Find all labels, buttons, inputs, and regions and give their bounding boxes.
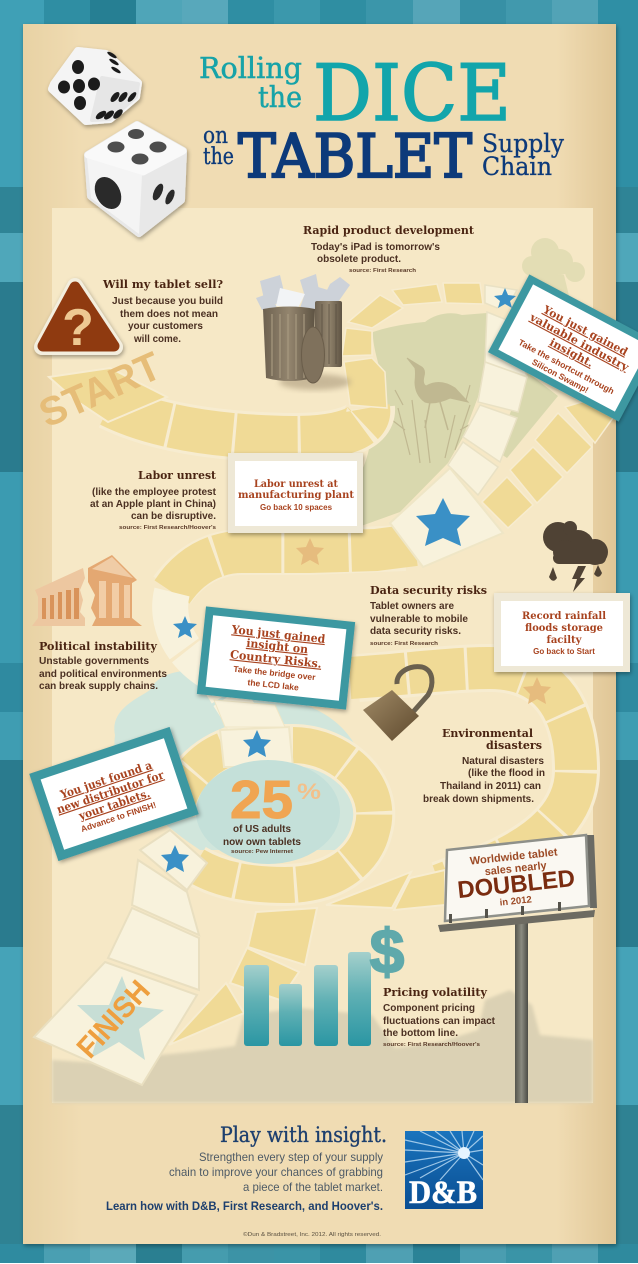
stars	[161, 288, 551, 872]
text: pricing volatility: the bottom line.	[383, 1027, 458, 1039]
text: will my tablet sell: Will my tablet sell?	[102, 278, 223, 291]
text: will my tablet sell	[102, 278, 223, 345]
card: valuable industry insight: insight.	[547, 336, 596, 370]
text: political instability	[39, 640, 167, 692]
icon: billboard: Worldwide tablet	[469, 846, 558, 868]
text: labor unrest: (like the employee protest	[92, 486, 216, 498]
text: data security risks: Data security risks	[370, 584, 487, 597]
title: the	[258, 80, 302, 114]
title: Supply	[482, 129, 565, 158]
stat: 25 percent: of US adults	[233, 823, 291, 835]
footer text: Strengthen every step of your supply	[199, 1150, 383, 1164]
card: labor unrest	[228, 453, 363, 533]
icon: die two	[87, 125, 183, 234]
text: pricing volatility: source: First Research/Hoover's	[383, 1042, 480, 1048]
text: pricing volatility	[383, 986, 495, 1048]
FINISH label: FINISH	[71, 974, 157, 1065]
stat: 25 percent: 25	[230, 770, 293, 830]
text: political instability: can break supply chains.	[39, 680, 158, 692]
stat: 25 percent: source: Pew Internet	[231, 849, 293, 855]
text: pricing volatility: fluctuations can impact	[383, 1015, 495, 1027]
card: new distributor: Advance to FINISH!	[79, 799, 158, 834]
card: new distributor: your tablets.	[76, 786, 152, 823]
board: lower branch tiles	[169, 870, 445, 1045]
title: TABLET	[238, 122, 472, 192]
card: valuable industry insight: Silicon Swamp!	[530, 357, 591, 395]
text: rapid product development	[303, 223, 475, 274]
text: labor unrest: Labor unrest	[138, 469, 217, 482]
logo: D&B	[405, 1131, 483, 1211]
text: environmental disasters: break down shipments.	[423, 793, 534, 805]
text: labor unrest: source: First Research/Hoover's	[119, 525, 216, 531]
text: labor unrest: at an Apple plant in China)	[90, 498, 216, 510]
text: environmental disasters: Environmental	[442, 727, 533, 740]
icon: question triangle: ?	[62, 299, 94, 357]
card: country risks: You just gained	[230, 622, 326, 646]
icon: trash cans	[256, 274, 351, 390]
title: Chain	[482, 152, 552, 181]
card: record rainfall: floods storage	[525, 622, 603, 634]
icon: die one	[52, 51, 138, 121]
card: country risks: insight on	[246, 636, 309, 656]
text: will my tablet sell: them does not mean	[120, 308, 218, 320]
text: data security risks	[370, 584, 487, 647]
icon: question triangle	[42, 286, 115, 357]
logo: D&B: D&B	[409, 1175, 477, 1211]
board: white shortcut tiles	[448, 285, 527, 495]
card: record rainfall: Record rainfall	[522, 610, 606, 622]
icon: broken building	[32, 555, 142, 626]
text: environmental disasters	[423, 727, 545, 805]
footer text: ©Dun & Bradstreet, Inc. 2012. All rights reserved.	[243, 1231, 382, 1238]
icon: dollar sign: $	[370, 918, 404, 987]
text: rapid product development: obsolete product.	[317, 253, 401, 265]
text: labor unrest: can be disruptive.	[131, 510, 216, 522]
board: right diagonal tiles	[482, 395, 615, 528]
card: valuable industry insight: Take the shortcut through	[517, 337, 616, 396]
lake	[114, 671, 371, 850]
text: data security risks: source: First Research	[370, 641, 439, 647]
card: new distributor	[29, 727, 199, 861]
card: record rainfall	[494, 593, 630, 672]
tree line silhouette	[52, 990, 593, 1103]
title: DICE	[313, 49, 511, 139]
text: rapid product development: Rapid product development	[303, 223, 475, 237]
card: valuable industry insight: valuable industry	[527, 310, 631, 374]
icon: billboard	[438, 835, 597, 1103]
text: pricing volatility: Pricing volatility	[383, 986, 488, 999]
text: will my tablet sell: Just because you build	[112, 295, 223, 307]
text: will my tablet sell: your customers	[128, 320, 203, 332]
card: labor unrest: Labor unrest at	[254, 478, 338, 490]
icon: billboard: DOUBLED	[456, 865, 576, 904]
board: finish tiles	[34, 830, 207, 1085]
card: valuable industry insight: You just gained	[540, 303, 630, 359]
card: new distributor: new distributor for	[55, 767, 166, 817]
title: Rolling	[199, 51, 302, 85]
title: on	[203, 123, 228, 149]
text: data security risks: Tablet owners are	[370, 600, 454, 612]
card: labor unrest: manufacturing plant	[238, 489, 354, 501]
footer text: chain to improve your chances of grabbing	[169, 1165, 383, 1179]
text: data security risks: data security risks.	[370, 625, 461, 637]
heron and reeds	[392, 358, 478, 463]
card: labor unrest: Go back 10 spaces	[260, 503, 333, 512]
board: big star tile	[390, 468, 503, 567]
board: loop star tile	[220, 727, 293, 767]
text: political instability: and political environments	[39, 668, 167, 680]
footer text: Learn how with D&B, First Research, and Hoover's.	[106, 1199, 383, 1213]
inner board panel	[52, 208, 593, 1103]
text: environmental disasters: Thailand in 2011) can	[440, 780, 541, 792]
card: new distributor: You just found a	[57, 758, 154, 802]
START label: START	[33, 344, 168, 436]
icon: storm cloud	[543, 521, 608, 592]
board: bridge tile	[214, 700, 285, 727]
footer text: a piece of the tablet market.	[243, 1180, 383, 1194]
swamp pond	[350, 313, 558, 530]
FINISH star	[77, 976, 164, 1060]
icon: billboard: sales nearly	[484, 860, 548, 878]
board: start tile	[49, 368, 167, 422]
title	[199, 49, 565, 192]
icon: billboard: in 2012	[499, 894, 532, 909]
card: record rainfall: facilty	[546, 634, 582, 646]
text: political instability: Unstable governments	[39, 655, 149, 667]
card: record rainfall: Go back to Start	[533, 647, 595, 656]
title: the	[203, 144, 234, 170]
board: upper ring tiles	[342, 283, 483, 408]
card: country risks	[197, 606, 355, 710]
chart: pricing bars	[244, 952, 371, 1046]
footer text: Play with insight.	[220, 1123, 387, 1147]
card: valuable industry insight	[488, 274, 638, 422]
footer text	[106, 1123, 387, 1238]
text: rapid product development: source: First Research	[349, 268, 417, 274]
stat: 25 percent	[223, 770, 321, 855]
text: environmental disasters: (like the flood in	[468, 767, 545, 779]
inner lake	[196, 760, 340, 864]
card: country risks: Take the bridge over	[233, 664, 317, 682]
text: environmental disasters: Natural disasters	[462, 755, 544, 767]
text: political instability: Political instability	[39, 640, 158, 653]
card: country risks: the LCD lake	[247, 677, 300, 693]
text: environmental disasters: disasters	[486, 739, 542, 752]
swamp tree	[522, 238, 585, 300]
card: country risks: Country Risks.	[229, 647, 322, 671]
icon: open padlock	[363, 667, 432, 741]
stat: 25 percent: now own tablets	[223, 836, 301, 848]
text: labor unrest	[90, 469, 217, 531]
stat: 25 percent: %	[297, 779, 321, 804]
text: data security risks: vulnerable to mobile	[370, 613, 468, 625]
game board path	[34, 283, 615, 1085]
text: will my tablet sell: will come.	[133, 333, 181, 345]
text: rapid product development: Today's iPad is tomorrow's	[311, 241, 440, 253]
text: pricing volatility: Component pricing	[383, 1002, 475, 1014]
